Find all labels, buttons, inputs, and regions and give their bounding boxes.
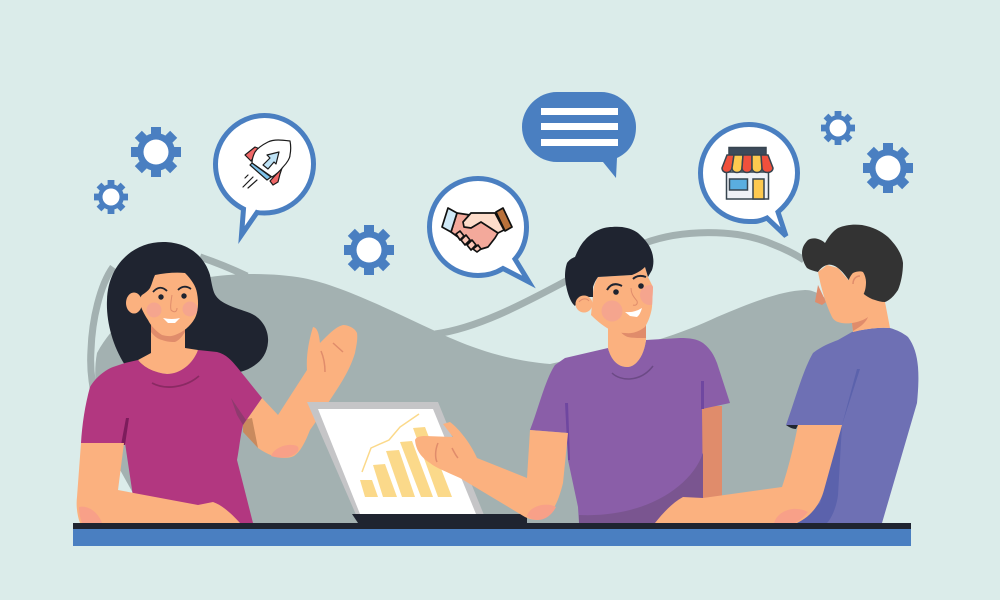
- person: man centre: [415, 227, 730, 523]
- near arm: [77, 443, 240, 523]
- neck: [138, 325, 198, 374]
- gear top left large: [131, 127, 181, 177]
- smile: [163, 318, 180, 323]
- icon: handshake: [442, 208, 512, 252]
- cheeks: [602, 285, 653, 322]
- shirt: [81, 350, 262, 523]
- hair: [107, 242, 268, 372]
- back arm: [702, 406, 722, 500]
- icon: shop: [722, 148, 773, 199]
- laptop: [307, 402, 527, 523]
- shirt: [530, 338, 730, 523]
- hair: [565, 227, 653, 306]
- nose: [815, 285, 826, 305]
- shirt: [786, 328, 918, 523]
- gear top right large: [863, 143, 913, 193]
- speech bubble: shop: [700, 124, 798, 236]
- ear: [576, 296, 592, 312]
- laptop base: [352, 514, 527, 523]
- neck: [608, 325, 646, 367]
- grey flowing line: [91, 233, 804, 392]
- far arm: [243, 325, 357, 458]
- speech bubble: handshake: [430, 178, 529, 282]
- eyes: [158, 294, 164, 300]
- icon: rocket: [243, 140, 291, 188]
- trend line: [362, 414, 419, 472]
- head and neck: [818, 265, 890, 332]
- grey background hills: [91, 233, 860, 523]
- cheeks: [146, 302, 198, 318]
- arm shadow: [243, 418, 258, 448]
- table: [73, 523, 911, 546]
- arm: [655, 425, 842, 523]
- ear: [126, 292, 142, 314]
- speech bubble: rocket: [216, 116, 314, 235]
- person: woman left: [77, 242, 357, 523]
- gear top left small: [94, 180, 128, 214]
- ear: [848, 271, 866, 295]
- shirt fold: [797, 369, 860, 523]
- gear centre: [344, 225, 394, 275]
- gear top right small: [821, 111, 855, 145]
- face: [591, 267, 653, 333]
- smile: [625, 308, 642, 317]
- eyes: [613, 289, 619, 295]
- bar chart: [360, 427, 452, 497]
- person: man right: [655, 225, 918, 523]
- face: [140, 273, 198, 336]
- hair: [802, 225, 903, 302]
- speech bubble: text lines: [522, 92, 636, 178]
- arm and hand: [415, 422, 568, 520]
